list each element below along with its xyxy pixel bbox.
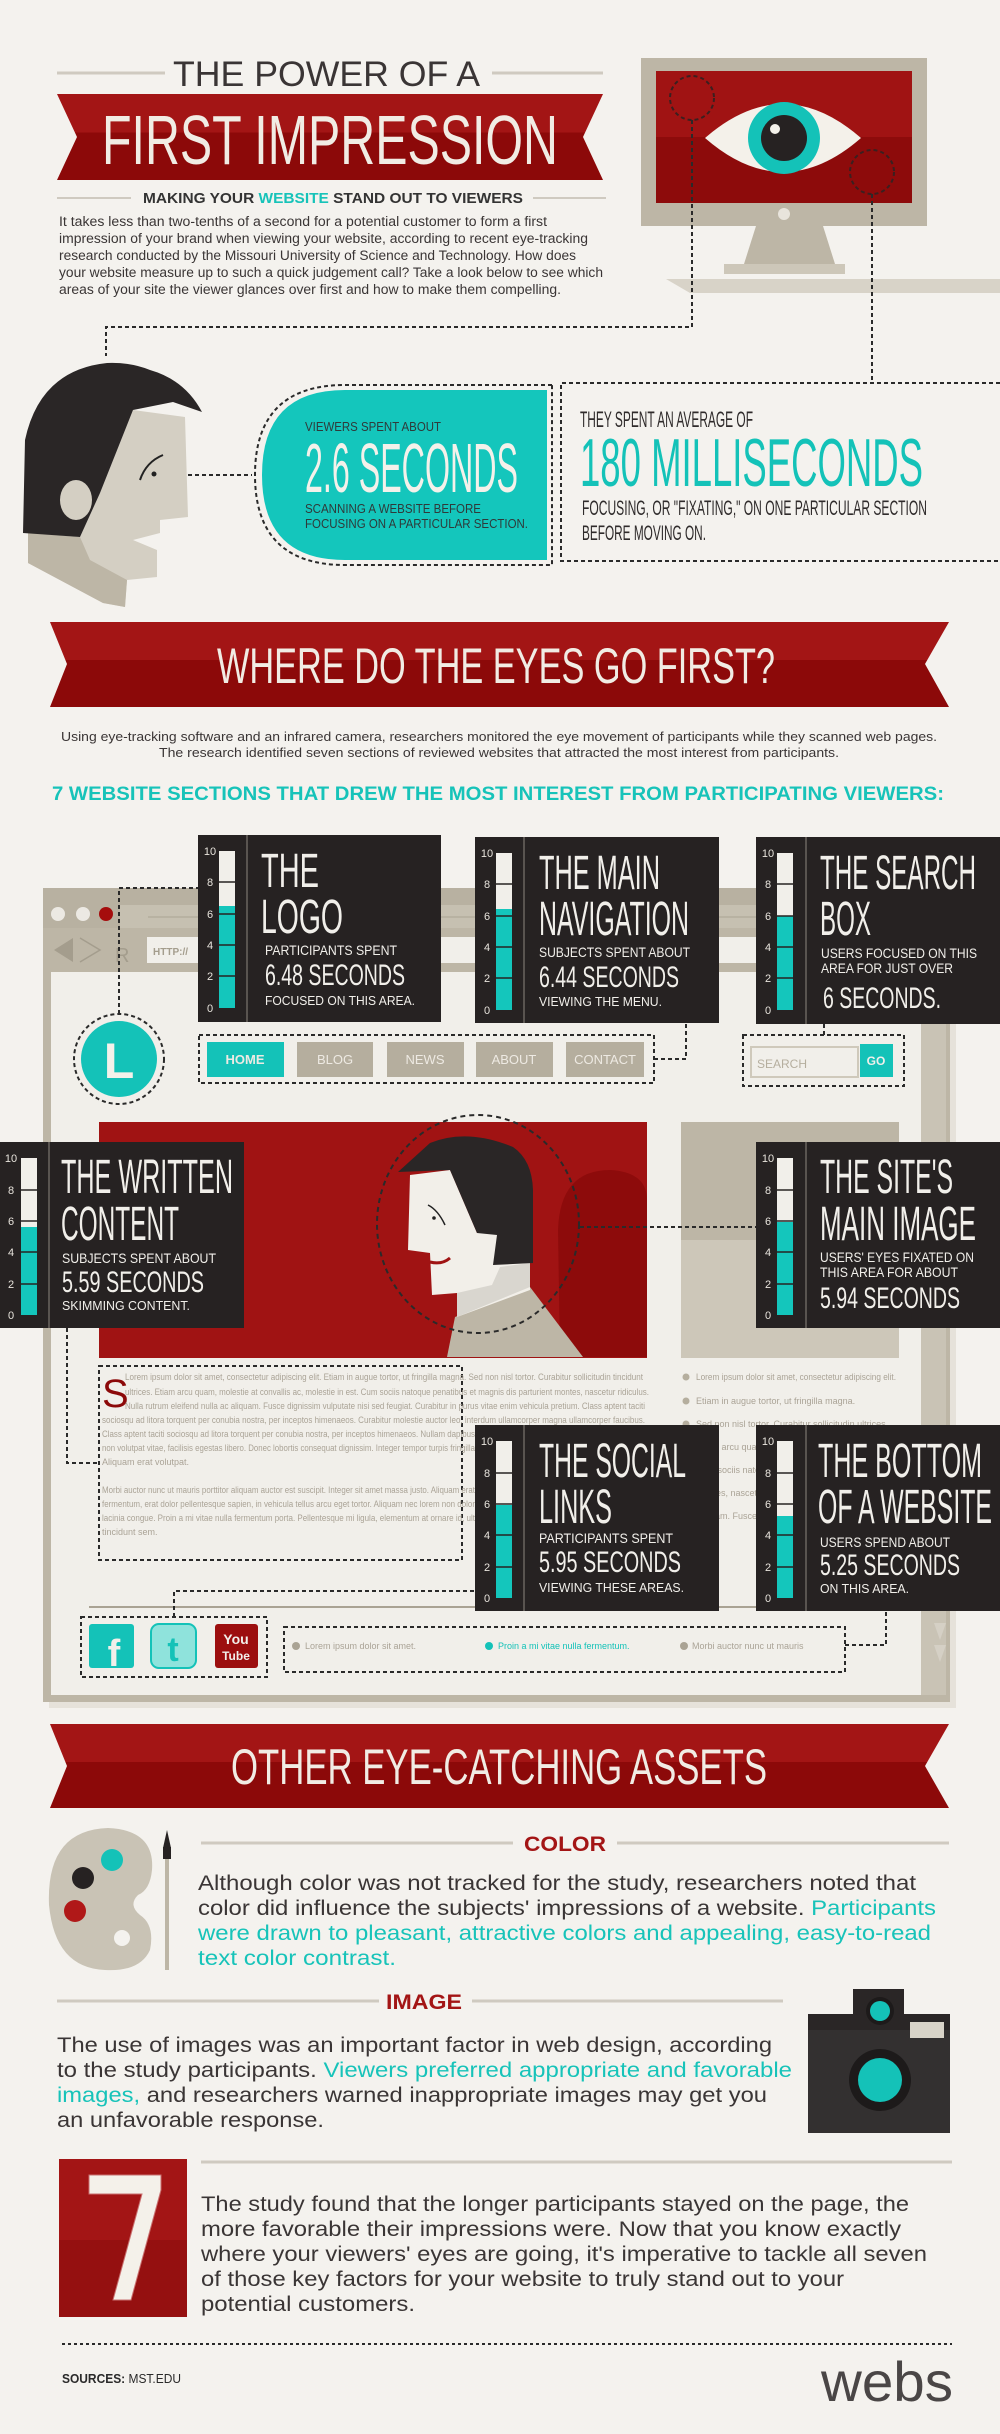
card: the written content: 8 bbox=[8, 1185, 14, 1197]
social links icons: You bbox=[223, 1631, 249, 1647]
written content text block: lacinia congue. Proin a mi vitae nulla fermentum porta. Pellentesque mi ligula, elementum at ornare id, ult bbox=[102, 1513, 475, 1523]
social links icons: t bbox=[167, 1631, 179, 1669]
browser mockup: HTTP:// bbox=[153, 947, 188, 958]
conclusion paragraph: The study found that the longer participants stayed on the page, the bbox=[201, 2193, 909, 2216]
card: the main navigation: 4 bbox=[484, 942, 490, 954]
stat: 2.6 seconds: 2.6 SECONDS bbox=[305, 429, 518, 507]
card: the social links: 10 bbox=[481, 1436, 493, 1448]
card: the site's main image: 8 bbox=[765, 1185, 771, 1197]
card: the written content: SUBJECTS SPENT ABOUT bbox=[62, 1250, 216, 1266]
written content text block: non volutpat vitae, facilisis egestas libero. Donec lobortis consequat dignissim. Integer tempor turpis fringilla bbox=[102, 1443, 475, 1453]
subtitle: making your website stand out: MAKING YOUR WEBSITE STAND OUT TO VIEWERS bbox=[143, 190, 523, 207]
written content text block: Aliquam erat volutpat. bbox=[102, 1457, 189, 1467]
footer links: Lorem ipsum dolor sit amet. bbox=[305, 1641, 416, 1651]
intro text: eye-tracking bbox=[61, 729, 937, 760]
card: the social links: 2 bbox=[484, 1562, 490, 1574]
card: the bottom of a website: ON THIS AREA. bbox=[820, 1581, 909, 1596]
card: the social links: PARTICIPANTS SPENT bbox=[539, 1530, 673, 1546]
section: color: Although color was not tracked for the study, researchers noted that bbox=[198, 1872, 916, 1895]
card: the site's main image bbox=[756, 1142, 1000, 1328]
written content text block: aliquam. Fusce d bbox=[696, 1511, 765, 1521]
card: the search box: USERS FOCUSED ON THIS bbox=[821, 945, 977, 961]
card: the written content: 6 bbox=[8, 1216, 14, 1228]
written content text block: tincidunt sem. bbox=[102, 1527, 158, 1537]
written content text block: Cum sociis natoque bbox=[696, 1465, 775, 1475]
card: the site's main image: 0 bbox=[765, 1310, 771, 1322]
connector logo bbox=[119, 888, 198, 1014]
written content text block: Etiam in augue tortor, ut fringilla magna. bbox=[696, 1396, 855, 1406]
card: the search box: 8 bbox=[765, 879, 771, 891]
written content text block: fermentum, erat dolor pellentesque sapien, in vehicula tellus arcu eget tortor. Aliquam nec lorem non dolor bbox=[102, 1499, 475, 1509]
stat: 2.6 seconds: FOCUSING ON A PARTICULAR SECTION. bbox=[305, 516, 528, 531]
stat: 180 milliseconds bbox=[561, 383, 1000, 561]
card: the logo: 6 bbox=[207, 909, 213, 921]
card: the bottom of a website: 10 bbox=[762, 1436, 774, 1448]
card: the main navigation: NAVIGATION bbox=[539, 893, 689, 946]
conclusion paragraph: where your viewers' eyes are going, it's imperative to tackle all seven bbox=[200, 2243, 927, 2266]
ribbon heading: other eye-catching assets: OTHER EYE-CATCHING ASSETS bbox=[231, 1739, 767, 1795]
card: the social links: LINKS bbox=[539, 1481, 612, 1534]
intro paragraph: It takes less than two-tenths of a second for a potential customer to form a first bbox=[59, 214, 547, 229]
section: image: IMAGE bbox=[386, 1991, 462, 2014]
card: the logo: THE bbox=[261, 845, 319, 898]
card: the logo: 2 bbox=[207, 971, 213, 983]
card: the bottom of a website: USERS SPEND ABOUT bbox=[820, 1534, 950, 1550]
card: the logo: 8 bbox=[207, 877, 213, 889]
stat: 2.6 seconds: SCANNING A WEBSITE BEFORE bbox=[305, 501, 481, 516]
conclusion paragraph: more favorable their impressions were. Now that you know exactly bbox=[201, 2218, 902, 2241]
card: the bottom of a website: 0 bbox=[765, 1593, 771, 1605]
card: the social links: 8 bbox=[484, 1468, 490, 1480]
connector head to stat bbox=[188, 474, 252, 476]
icon: camera bbox=[808, 1989, 950, 2133]
card: the logo: 6.48 SECONDS bbox=[265, 959, 405, 992]
title ribbon: first impression: FIRST IMPRESSION bbox=[102, 101, 558, 179]
logo circle: L bbox=[104, 1033, 134, 1089]
ribbon heading: other eye-catching assets bbox=[50, 1724, 949, 1808]
card: the social links: VIEWING THESE AREAS. bbox=[539, 1580, 684, 1595]
navigation bar: HOME bbox=[226, 1052, 265, 1067]
social links icons: f bbox=[108, 1633, 121, 1675]
intro text: eye-tracking: Using eye-tracking software and an infrared camera, researchers monitored the eye movement of participants while they scanned web pages. bbox=[61, 729, 937, 744]
card: the main navigation: SUBJECTS SPENT ABOUT bbox=[539, 944, 690, 960]
intro paragraph: research conducted by the Missouri University of Science and Technology. How does bbox=[59, 248, 576, 263]
section: color bbox=[197, 1833, 949, 1970]
card: the written content: 2 bbox=[8, 1279, 14, 1291]
card: the social links: 6 bbox=[484, 1499, 490, 1511]
written content text block bbox=[99, 1366, 896, 1560]
title: the power of a: THE POWER OF A bbox=[173, 55, 481, 94]
card: the main navigation: VIEWING THE MENU. bbox=[539, 994, 662, 1009]
card: the written content: THE WRITTEN bbox=[61, 1151, 233, 1204]
card: the main navigation: 10 bbox=[481, 848, 493, 860]
stat: 2.6 seconds: VIEWERS SPENT ABOUT bbox=[305, 419, 441, 434]
navigation bar bbox=[199, 1035, 654, 1083]
card: the main navigation: 0 bbox=[484, 1005, 490, 1017]
section: color: were drawn to pleasant, attractive colors and appealing, easy-to-read bbox=[197, 1922, 931, 1945]
card: the logo: LOGO bbox=[261, 891, 343, 944]
written content text block: montes, nascetur bbox=[696, 1488, 765, 1498]
navigation bar: NEWS bbox=[406, 1052, 445, 1067]
card: the written content: 4 bbox=[8, 1247, 14, 1259]
teal heading: 7 website sections: 7 WEBSITE SECTIONS THAT DREW THE MOST INTEREST FROM PARTICIPATING VIEWERS: bbox=[52, 784, 944, 805]
footer links: Proin a mi vitae nulla fermentum. bbox=[498, 1641, 630, 1651]
card: the search box: AREA FOR JUST OVER bbox=[821, 960, 953, 976]
card: the site's main image: 2 bbox=[765, 1279, 771, 1291]
conclusion paragraph: potential customers. bbox=[201, 2293, 415, 2316]
card: the social links: 4 bbox=[484, 1530, 490, 1542]
card: the main navigation bbox=[475, 837, 719, 1023]
connector lines from monitor bbox=[106, 120, 872, 383]
card: the bottom of a website: 6 bbox=[765, 1499, 771, 1511]
card: the written content bbox=[0, 1142, 244, 1328]
card: the written content: CONTENT bbox=[61, 1198, 179, 1251]
stat: 180 milliseconds: BEFORE MOVING ON. bbox=[582, 522, 706, 545]
sources: SOURCES: MST.EDU bbox=[62, 2371, 181, 2386]
logo circle bbox=[74, 1014, 164, 1104]
card: the search box: 6 SECONDS. bbox=[823, 982, 941, 1015]
card: the logo: 10 bbox=[204, 846, 216, 858]
card: the social links: 5.95 SECONDS bbox=[539, 1546, 681, 1579]
section: image: images, and researchers warned inappropriate images may get you bbox=[57, 2084, 767, 2107]
card: the main navigation: 2 bbox=[484, 973, 490, 985]
intro paragraph bbox=[59, 214, 603, 297]
written content text block: S bbox=[102, 1372, 129, 1416]
card: the search box bbox=[756, 837, 1000, 1024]
card: the site's main image: 4 bbox=[765, 1247, 771, 1259]
written content text block: sociosqu ad litora torquent per conubia nostra, per inceptos himenaeos. Curabitur molestie auctor leo, interdum ullamcorper magna ullamcorper faucibus. bbox=[102, 1415, 645, 1425]
main image: red banner with man bbox=[99, 1122, 899, 1358]
card: the social links bbox=[475, 1425, 719, 1611]
stat: 2.6 seconds bbox=[255, 385, 552, 565]
section: image: The use of images was an important factor in web design, according bbox=[57, 2034, 772, 2057]
ribbon heading: where do the eyes go first bbox=[50, 622, 949, 707]
written content text block: Lorem ipsum dolor sit amet, consectetur adipiscing elit. Etiam in augue tortor, ut fringilla magna. Sed non nisl tortor. Curabitur sollicitudin tincidunt bbox=[125, 1372, 643, 1382]
icon: paint palette and brush bbox=[49, 1828, 171, 1970]
section: color: color did influence the subjects' impressions of a website. Participants bbox=[198, 1897, 936, 1920]
card: the logo: FOCUSED ON THIS AREA. bbox=[265, 993, 415, 1008]
focus circle on main image bbox=[377, 1115, 579, 1333]
browser mockup bbox=[43, 888, 956, 1708]
card: the logo: PARTICIPANTS SPENT bbox=[265, 942, 397, 958]
title ribbon: first impression bbox=[57, 94, 603, 180]
section: image bbox=[57, 1991, 792, 2132]
card: the site's main image: 10 bbox=[762, 1153, 774, 1165]
card: the bottom of a website: 4 bbox=[765, 1530, 771, 1542]
section: color: COLOR bbox=[524, 1833, 606, 1856]
card: the search box: 0 bbox=[765, 1005, 771, 1017]
icon: monitor with eye bbox=[641, 58, 1000, 293]
card: the bottom of a website bbox=[756, 1425, 1000, 1611]
connector nav bbox=[654, 1023, 686, 1059]
section: image: an unfavorable response. bbox=[57, 2109, 324, 2132]
intro paragraph: impression of your brand when viewing your website, according to recent eye-tracking bbox=[59, 231, 588, 246]
written content text block: Sed non nisl tortor. Curabitur sollicitudin ultrices bbox=[696, 1419, 886, 1429]
social links icons bbox=[81, 1617, 267, 1677]
navigation bar: ABOUT bbox=[492, 1052, 536, 1067]
written content text block: Morbi auctor nunc ut mauris porttitor aliquam auctor est suscipit. Integer sit amet massa justo. Aliquam erat bbox=[102, 1485, 475, 1495]
stat: 180 milliseconds: THEY SPENT AN AVERAGE OF bbox=[580, 407, 753, 432]
card: the site's main image: 6 bbox=[765, 1216, 771, 1228]
card: the search box: 2 bbox=[765, 973, 771, 985]
search box: SEARCH bbox=[757, 1057, 807, 1071]
written content text block: Nulla rutrum eleifend nulla ac aliquam. Fusce dignissim vulputate nisi sed feugiat. Curabitur in purus vitae enim vehicula pretium. Class aptent taciti bbox=[125, 1401, 645, 1411]
browser mockup: R bbox=[115, 945, 129, 967]
card: the social links: THE SOCIAL bbox=[539, 1435, 686, 1488]
conclusion paragraph bbox=[200, 2162, 952, 2316]
card: the main navigation: 8 bbox=[484, 879, 490, 891]
footer links bbox=[284, 1627, 845, 1672]
card: the written content: 0 bbox=[8, 1310, 14, 1322]
written content text block: Lorem ipsum dolor sit amet, consectetur adipiscing elit. bbox=[696, 1372, 896, 1382]
card: the logo: 4 bbox=[207, 940, 213, 952]
footer links: Morbi auctor nunc ut mauris bbox=[692, 1641, 804, 1651]
search box bbox=[743, 1035, 904, 1086]
card: the social links: 0 bbox=[484, 1593, 490, 1605]
logo: webs: webs bbox=[820, 2350, 953, 2413]
card: the site's main image: USERS' EYES FIXATED ON bbox=[820, 1249, 974, 1265]
card: the logo: 0 bbox=[207, 1003, 213, 1015]
section: color: text color contrast. bbox=[198, 1947, 396, 1970]
written content text block: Etiam arcu quam, molestie bbox=[696, 1442, 803, 1452]
social links icons: Tube bbox=[222, 1649, 250, 1663]
card: the written content: 5.59 SECONDS bbox=[62, 1266, 204, 1299]
card: the main navigation: THE MAIN bbox=[539, 847, 660, 900]
intro text: eye-tracking: The research identified seven sections of reviewed websites that attracted the most interest from participants. bbox=[159, 745, 839, 760]
card: the main navigation: 6 bbox=[484, 911, 490, 923]
written content text block: ultrices. Etiam arcu quam, molestie at convallis ac, molestie in est. Cum sociis natoque penatibus et magnis dis parturient montes, nascetur ridiculus. bbox=[125, 1387, 649, 1397]
navigation bar: BLOG bbox=[317, 1052, 353, 1067]
card: the search box: 6 bbox=[765, 911, 771, 923]
card: the bottom of a website: 2 bbox=[765, 1562, 771, 1574]
card: the written content: SKIMMING CONTENT. bbox=[62, 1298, 190, 1313]
section: image: to the study participants. Viewers preferred appropriate and favorable bbox=[57, 2059, 792, 2082]
intro paragraph: areas of your site the viewer glances over first and how to make them compelling. bbox=[59, 282, 561, 297]
card: the bottom of a website: 8 bbox=[765, 1468, 771, 1480]
card: the main navigation: 6.44 SECONDS bbox=[539, 961, 679, 994]
icon: man head profile bbox=[23, 363, 202, 607]
card: the logo bbox=[198, 835, 441, 1022]
navigation bar: CONTACT bbox=[574, 1052, 636, 1067]
conclusion paragraph: of those key factors for your website to truly stand out to your bbox=[201, 2268, 844, 2291]
card: the search box: BOX bbox=[820, 893, 871, 946]
card: the written content: 10 bbox=[5, 1153, 17, 1165]
intro paragraph: your website measure up to such a quick judgement call? Take a look below to see which bbox=[59, 265, 603, 280]
connector written content bbox=[67, 1328, 99, 1463]
card: the search box: 10 bbox=[762, 848, 774, 860]
icon: number 7 bbox=[59, 2159, 187, 2317]
card: the search box: 4 bbox=[765, 942, 771, 954]
card: the site's main image: THIS AREA FOR ABOUT bbox=[820, 1264, 958, 1280]
search box: GO bbox=[867, 1054, 885, 1068]
written content text block: Class aptent taciti sociosqu ad litora torquent per conubia nostra, per inceptos himenaeos. Nullam dapibus bbox=[102, 1429, 475, 1439]
